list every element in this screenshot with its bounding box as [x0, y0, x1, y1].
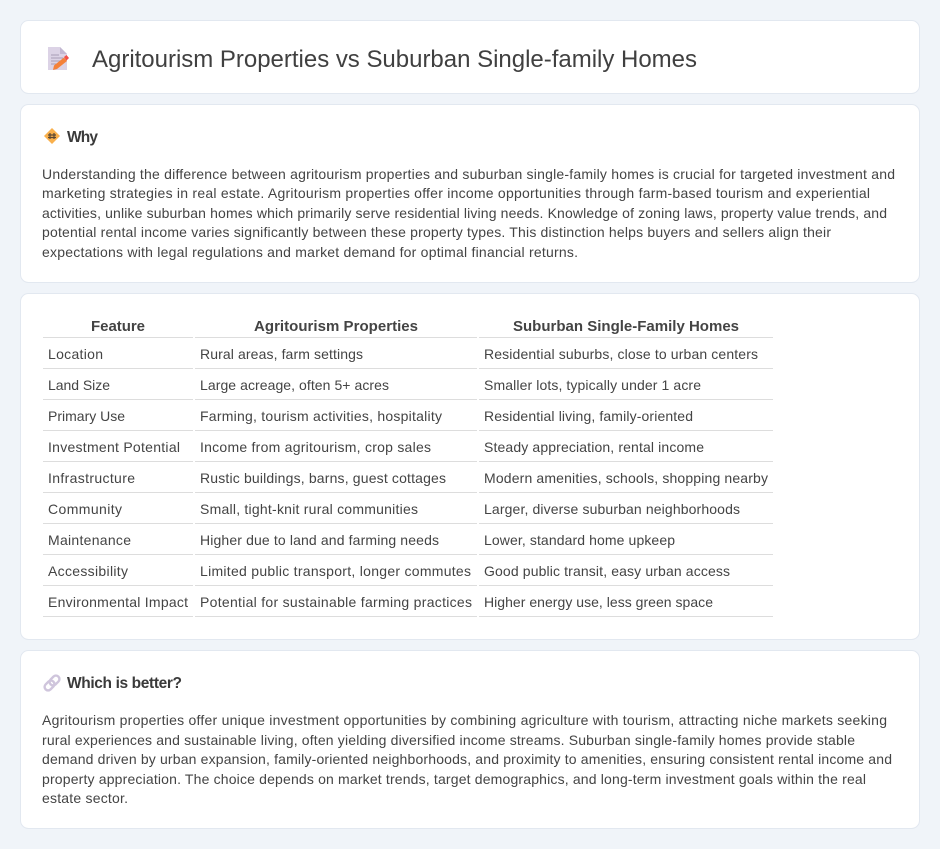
- text block: why paragraph: activities, unlike suburban homes which primarily serve residential living needs. Knowledge of zoning laws, property value trends, and: [42, 205, 887, 221]
- text block: which is better paragraph: [42, 712, 892, 806]
- table row: environmental impact: [43, 594, 773, 616]
- text block: which is better paragraph: rural experiences and sustainable living, often yielding diversified income streams. Suburban single-family homes provide stable: [42, 732, 855, 748]
- table row: land size: Smaller lots, typically under 1 acre: [484, 377, 701, 393]
- text block: why paragraph: marketing strategies in real estate. Agritourism properties offer income opportunities through farm-based tourism and experiential: [42, 185, 870, 201]
- table row: maintenance: Lower, standard home upkeep: [484, 532, 675, 548]
- table row: investment potential: [43, 439, 773, 462]
- table row: environmental impact: Potential for sustainable farming practices: [200, 594, 472, 610]
- text block: which is better paragraph: estate sector.: [42, 790, 128, 806]
- table row: land size: Large acreage, often 5+ acres: [200, 377, 389, 393]
- heading: why: Why: [67, 129, 98, 146]
- table row: location: [43, 346, 773, 368]
- table row: community: Larger, diverse suburban neighborhoods: [484, 501, 740, 517]
- panel: why: [20, 104, 920, 282]
- heading: which is better: Which is better?: [67, 675, 182, 692]
- table row: primary use: [43, 408, 773, 430]
- table row: infrastructure: Modern amenities, schools, shopping nearby: [484, 470, 768, 486]
- panel: title header: [20, 20, 920, 94]
- text block: why paragraph: expectations with legal regulations and market demand for optimal financial returns.: [42, 244, 578, 260]
- table row: primary use: Residential living, family-oriented: [484, 408, 693, 424]
- table row: accessibility: Good public transit, easy urban access: [484, 563, 730, 579]
- icon: orange diamond sign: [44, 128, 60, 144]
- table row: primary use: Farming, tourism activities, hospitality: [200, 408, 442, 424]
- table row: maintenance: [43, 532, 773, 554]
- icon: document with pencil: [48, 47, 69, 70]
- table row: maintenance: Higher due to land and farming needs: [200, 532, 439, 548]
- table row: accessibility: Accessibility: [48, 563, 128, 579]
- table row: investment potential: Income from agritourism, crop sales: [200, 439, 431, 455]
- table row: land size: [43, 377, 773, 400]
- table header row: Suburban Single-Family Homes: [513, 318, 739, 335]
- text block: which is better paragraph: property appreciation. The choice depends on market trends, target demographics, and long-term investment goals within the real: [42, 771, 866, 787]
- table row: primary use: Primary Use: [48, 408, 125, 424]
- table row: investment potential: Investment Potential: [48, 439, 180, 455]
- table row: investment potential: Steady appreciation, rental income: [484, 439, 704, 455]
- text block: why paragraph: Understanding the difference between agritourism properties and suburban single-family homes is crucial for targeted investment and: [42, 166, 895, 182]
- text block: why paragraph: potential rental income varies significantly between these property types. This distinction helps buyers and sellers align their: [42, 224, 831, 240]
- table header row: Agritourism Properties: [254, 318, 418, 335]
- text block: why paragraph: [42, 166, 895, 260]
- table row: location: Rural areas, farm settings: [200, 346, 363, 362]
- table row: accessibility: Limited public transport, longer commutes: [200, 563, 471, 579]
- table row: land size: Land Size: [48, 377, 110, 393]
- table header row: Feature: [91, 318, 145, 335]
- table row: community: Community: [48, 501, 122, 517]
- icon: chain link: [43, 674, 61, 692]
- table row: community: [43, 501, 773, 524]
- table row: infrastructure: Rustic buildings, barns, guest cottages: [200, 470, 446, 486]
- text block: which is better paragraph: demand driven by urban expansion, family-oriented neighborhoods, and proximity to amenities, ensuring consistent rental income and: [42, 751, 892, 767]
- table row: maintenance: Maintenance: [48, 532, 131, 548]
- panel: which is better: [20, 650, 920, 828]
- title: Agritourism Properties vs Suburban Single-family Homes: [92, 46, 697, 73]
- table row: location: Residential suburbs, close to urban centers: [484, 346, 758, 362]
- table row: infrastructure: [43, 470, 773, 492]
- table row: environmental impact: Environmental Impact: [48, 594, 188, 610]
- table row: environmental impact: Higher energy use, less green space: [484, 594, 713, 610]
- text block: which is better paragraph: Agritourism properties offer unique investment opportunities by combining agriculture with tourism, attracting niche markets seeking: [42, 712, 887, 728]
- table row: accessibility: [43, 563, 773, 586]
- table row: location: Location: [48, 346, 103, 362]
- table row: community: Small, tight-knit rural communities: [200, 501, 418, 517]
- table row: infrastructure: Infrastructure: [48, 470, 135, 486]
- panel: comparison table: [20, 294, 920, 640]
- table header row: [43, 318, 773, 338]
